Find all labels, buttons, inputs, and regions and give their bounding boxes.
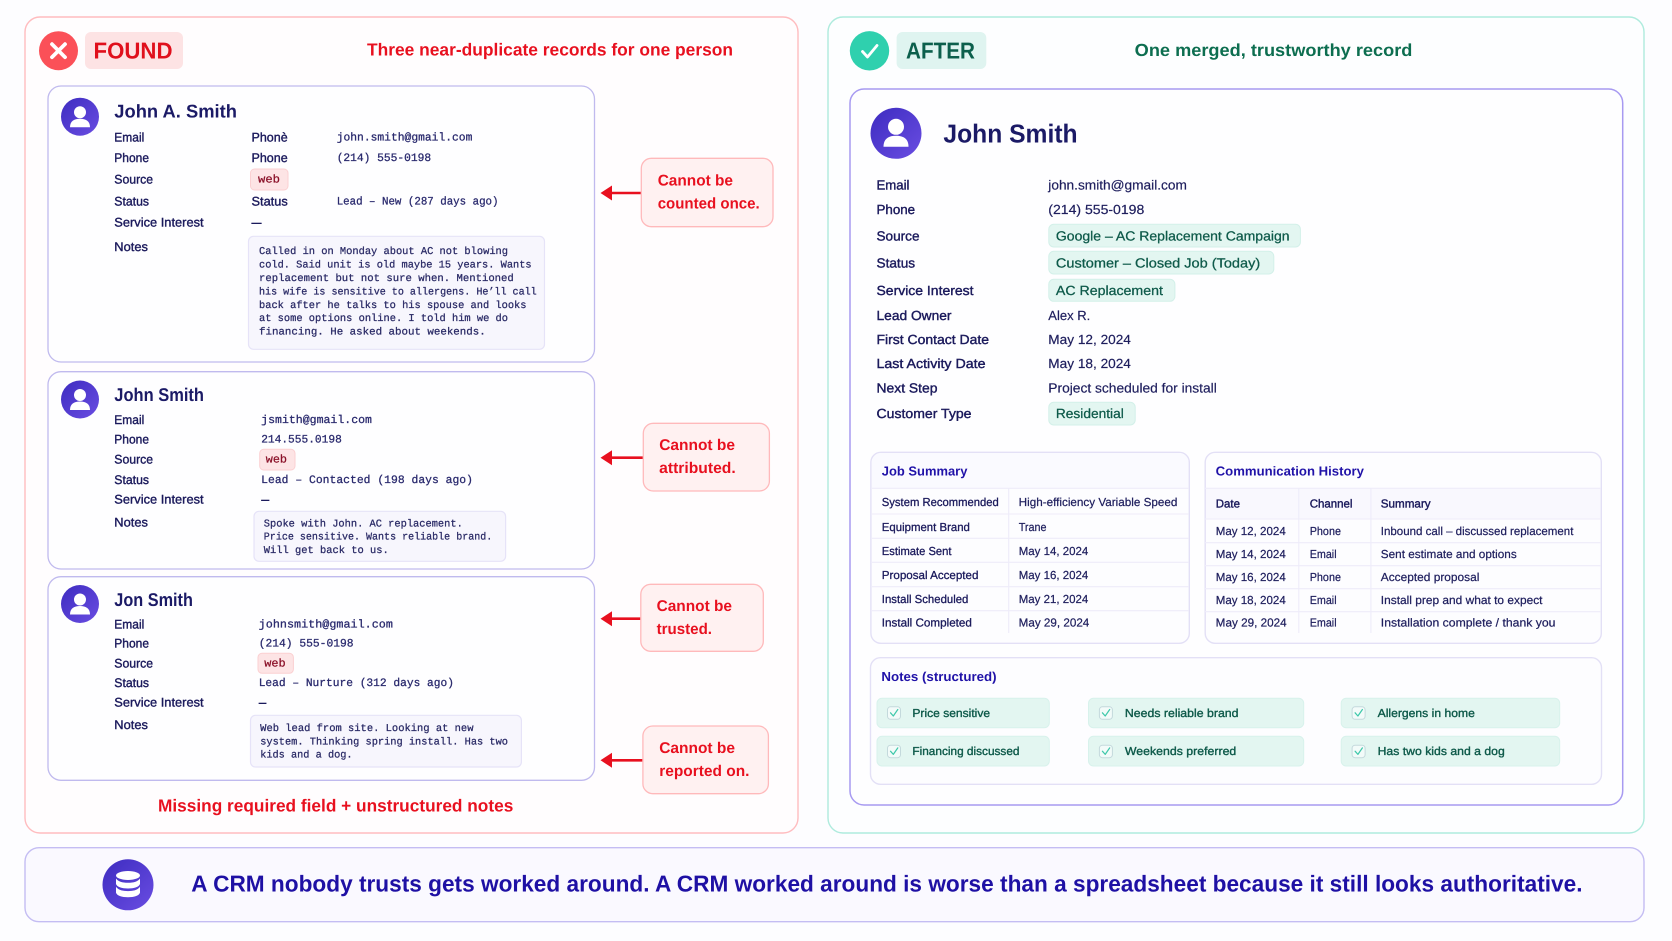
- field labels: Service Interest: [876, 283, 974, 298]
- name: John Smith: [943, 118, 1078, 148]
- field values: [260, 414, 473, 507]
- heading: found: FOUND: [94, 38, 172, 64]
- table header: Channel: [1310, 498, 1352, 510]
- table rows: May 16, 2024: [1019, 569, 1089, 582]
- table rows: Accepted proposal: [1381, 571, 1479, 584]
- field labels: Status: [114, 676, 149, 690]
- table rows: May 29, 2024: [1019, 616, 1090, 630]
- banner: takeaway: [25, 848, 1644, 922]
- table header: Summary: [1381, 498, 1431, 510]
- field values: Alex R.: [1048, 308, 1090, 323]
- field labels: Next Step: [876, 380, 938, 396]
- field values: john.smith@gmail.com: [337, 131, 473, 144]
- merged record card: [850, 89, 1623, 805]
- panel: found: [25, 17, 798, 833]
- panel: structured notes: [870, 658, 1602, 784]
- callout: cannot be counted once: counted once.: [658, 196, 760, 212]
- field labels: Status: [114, 473, 149, 487]
- unstructured notes: system. Thinking spring install. Has two: [260, 736, 508, 748]
- panel: after: [828, 17, 1644, 833]
- table: job summary: [871, 452, 1189, 643]
- unstructured notes: Price sensitive. Wants reliable brand.: [264, 532, 492, 544]
- field values: AC Replacement: [1056, 283, 1163, 298]
- field labels: Notes: [114, 718, 148, 732]
- icon: database: [102, 859, 154, 910]
- chip: financing discussed: Financing discussed: [912, 745, 1020, 758]
- table title: Job Summary: [882, 464, 968, 478]
- unstructured notes: [250, 715, 521, 767]
- chip: needs reliable brand: [1088, 698, 1304, 728]
- field values: [250, 130, 498, 230]
- field labels: Source: [114, 656, 153, 670]
- field labels: Source: [876, 228, 920, 244]
- field values: Google – AC Replacement Campaign: [1056, 228, 1290, 244]
- chip: financing discussed: [877, 736, 1049, 766]
- field values: —: [261, 493, 270, 507]
- field labels: First Contact Date: [876, 332, 989, 347]
- name: John Smith: [114, 384, 204, 405]
- field values: web: [266, 454, 287, 467]
- field values: jsmith@gmail.com: [261, 414, 372, 427]
- unstructured notes: replacement but not sure when. Mentioned: [259, 273, 514, 285]
- record card: John A. Smith: [48, 86, 594, 362]
- table rows: [882, 496, 1177, 630]
- field labels: Service Interest: [114, 493, 204, 507]
- chip: weekends preferred: [1088, 736, 1304, 766]
- field labels: Email: [114, 130, 144, 144]
- table: communication history: [1205, 452, 1601, 643]
- field values: Customer – Closed Job (Today): [1056, 256, 1260, 270]
- field values: Phone: [252, 151, 288, 165]
- field labels: Status: [114, 194, 149, 208]
- table rows: Email: [1310, 616, 1337, 630]
- chip: weekends preferred: Weekends preferred: [1125, 745, 1236, 758]
- unstructured notes: back after he talks to his spouse and looks: [259, 300, 526, 312]
- table rows: High-efficiency Variable Speed: [1019, 496, 1177, 509]
- callout: cannot be reported on: [600, 726, 768, 794]
- table rows: Install Completed: [882, 616, 972, 630]
- field values: —: [252, 216, 262, 230]
- table rows: May 29, 2024: [1216, 616, 1287, 630]
- table rows: May 21, 2024: [1019, 593, 1089, 606]
- table rows: Email: [1310, 594, 1337, 607]
- field values: Status: [252, 194, 288, 208]
- table title: Communication History: [1216, 464, 1365, 478]
- table header: [1216, 498, 1431, 510]
- callout: cannot be counted once: [600, 158, 773, 227]
- table rows: May 14, 2024: [1019, 545, 1089, 558]
- unstructured notes: Web lead from site. Looking at new: [260, 723, 474, 735]
- callout: cannot be attributed: attributed.: [659, 460, 736, 477]
- chip: has two kids and a dog: [1341, 736, 1560, 766]
- table rows: Email: [1310, 548, 1337, 561]
- field values: web: [258, 174, 280, 187]
- field labels: [114, 413, 204, 529]
- unstructured notes: [248, 236, 544, 349]
- field values: (214) 555-0198: [259, 638, 354, 651]
- table rows: Trane: [1019, 521, 1046, 534]
- field labels: Email: [114, 413, 144, 427]
- table header: Date: [1216, 498, 1240, 510]
- table rows: Install Scheduled: [882, 593, 968, 606]
- table rows: Phone: [1310, 571, 1341, 584]
- field values: [258, 618, 454, 710]
- field labels: Status: [876, 256, 916, 270]
- field values: May 12, 2024: [1048, 332, 1131, 347]
- record card: Jon Smith: [48, 577, 594, 780]
- field values: 214.555.0198: [261, 434, 342, 446]
- name: Jon Smith: [114, 589, 193, 610]
- icon: avatar: [61, 380, 99, 418]
- unstructured notes: Spoke with John. AC replacement.: [264, 518, 463, 530]
- unstructured notes: his wife is sensitive to allergens. He’ll call: [259, 286, 537, 298]
- chip: price sensitive: Price sensitive: [912, 707, 990, 720]
- subtitle: one merged record: One merged, trustworthy record: [1135, 40, 1412, 60]
- table rows: May 16, 2024: [1216, 571, 1286, 584]
- unstructured notes: [254, 511, 506, 561]
- callout: cannot be attributed: Cannot be: [659, 437, 735, 454]
- heading: found: [85, 32, 183, 69]
- callout: cannot be trusted: [600, 584, 763, 651]
- field values: Residential: [1056, 406, 1124, 421]
- callout: cannot be trusted: Cannot be: [657, 598, 732, 615]
- heading: after: [897, 32, 986, 69]
- name: John A. Smith: [114, 100, 237, 122]
- table rows: Phone: [1310, 525, 1341, 538]
- icon: avatar: [61, 585, 99, 623]
- icon: green check badge: [850, 31, 889, 70]
- table rows: Install prep and what to expect: [1381, 594, 1543, 607]
- field values: (214) 555-0198: [1048, 202, 1144, 217]
- field values: [1047, 178, 1300, 425]
- heading: after: AFTER: [906, 37, 975, 63]
- field labels: [114, 130, 204, 254]
- field labels: [114, 617, 204, 732]
- field labels: Customer Type: [876, 406, 972, 421]
- field values: Lead – Nurture (312 days ago): [259, 677, 454, 690]
- record card: John Smith: [48, 372, 594, 569]
- unstructured notes: cold. Said unit is old maybe 15 years. Wants: [259, 259, 532, 271]
- field values: web: [264, 657, 286, 670]
- field values: john.smith@gmail.com: [1047, 178, 1187, 192]
- table rows: Estimate Sent: [882, 545, 952, 558]
- field labels: Phone: [876, 202, 915, 217]
- takeaway text: A CRM nobody trusts gets worked around. A CRM worked around is worse than a spreadsheet because it still looks authoritative.: [191, 870, 1582, 896]
- table rows: Proposal Accepted: [882, 569, 978, 582]
- field values: Project scheduled for install: [1048, 380, 1217, 396]
- icon: avatar: [61, 98, 99, 136]
- callout: cannot be reported on: Cannot be: [659, 740, 735, 757]
- caption: missing required field: Missing required field + unstructured notes: [158, 796, 514, 816]
- field values: May 18, 2024: [1048, 356, 1131, 371]
- icon: avatar: [870, 108, 922, 159]
- table rows: May 14, 2024: [1216, 548, 1286, 561]
- field labels: Phone: [114, 432, 149, 446]
- field labels: Source: [114, 173, 153, 187]
- field values: —: [259, 696, 267, 710]
- chip: has two kids and a dog: Has two kids and a dog: [1378, 745, 1505, 758]
- table rows: May 18, 2024: [1216, 594, 1286, 607]
- chip: needs reliable brand: Needs reliable brand: [1125, 707, 1238, 720]
- field labels: Phone: [114, 151, 149, 165]
- field labels: Service Interest: [114, 216, 204, 230]
- chip: price sensitive: [877, 698, 1049, 728]
- table rows: System Recommended: [882, 496, 999, 509]
- field labels: Notes: [114, 240, 148, 254]
- callout: cannot be trusted: trusted.: [657, 621, 712, 638]
- field values: Phonè: [252, 130, 288, 144]
- table rows: Installation complete / thank you: [1381, 616, 1556, 630]
- field values: Lead – Contacted (198 days ago): [261, 474, 473, 487]
- callout: cannot be counted once: Cannot be: [658, 172, 733, 190]
- field labels: Last Activity Date: [876, 356, 986, 371]
- table rows: Inbound call – discussed replacement: [1381, 525, 1574, 538]
- table rows: Sent estimate and options: [1381, 548, 1517, 561]
- unstructured notes: Called in on Monday about AC not blowing: [259, 246, 508, 258]
- unstructured notes: financing. He asked about weekends.: [259, 327, 486, 339]
- icon: red x badge: [39, 31, 78, 70]
- chip: allergens in home: [1341, 698, 1560, 728]
- field labels: [876, 178, 989, 421]
- field values: (214) 555-0198: [337, 152, 431, 165]
- unstructured notes: Will get back to us.: [264, 545, 389, 557]
- callout: cannot be reported on: reported on.: [659, 763, 750, 780]
- notes title: Notes (structured): [881, 669, 997, 684]
- field values: johnsmith@gmail.com: [259, 618, 393, 631]
- unstructured notes: kids and a dog.: [260, 750, 353, 762]
- field labels: Phone: [114, 637, 149, 651]
- field labels: Email: [114, 617, 144, 631]
- subtitle: three near-duplicate records: Three near-duplicate records for one person: [367, 40, 733, 60]
- field values: Lead – New (287 days ago): [337, 195, 498, 208]
- field labels: Service Interest: [114, 696, 204, 710]
- table rows: [1216, 525, 1574, 630]
- unstructured notes: at some options online. I told him we do: [259, 313, 508, 325]
- chip: allergens in home: Allergens in home: [1378, 707, 1475, 720]
- table rows: Equipment Brand: [882, 521, 970, 534]
- callout: cannot be attributed: [600, 423, 769, 491]
- table rows: May 12, 2024: [1216, 525, 1286, 538]
- field labels: Notes: [114, 515, 148, 529]
- field labels: Source: [114, 453, 153, 467]
- field labels: Email: [876, 178, 910, 192]
- field labels: Lead Owner: [876, 308, 952, 323]
